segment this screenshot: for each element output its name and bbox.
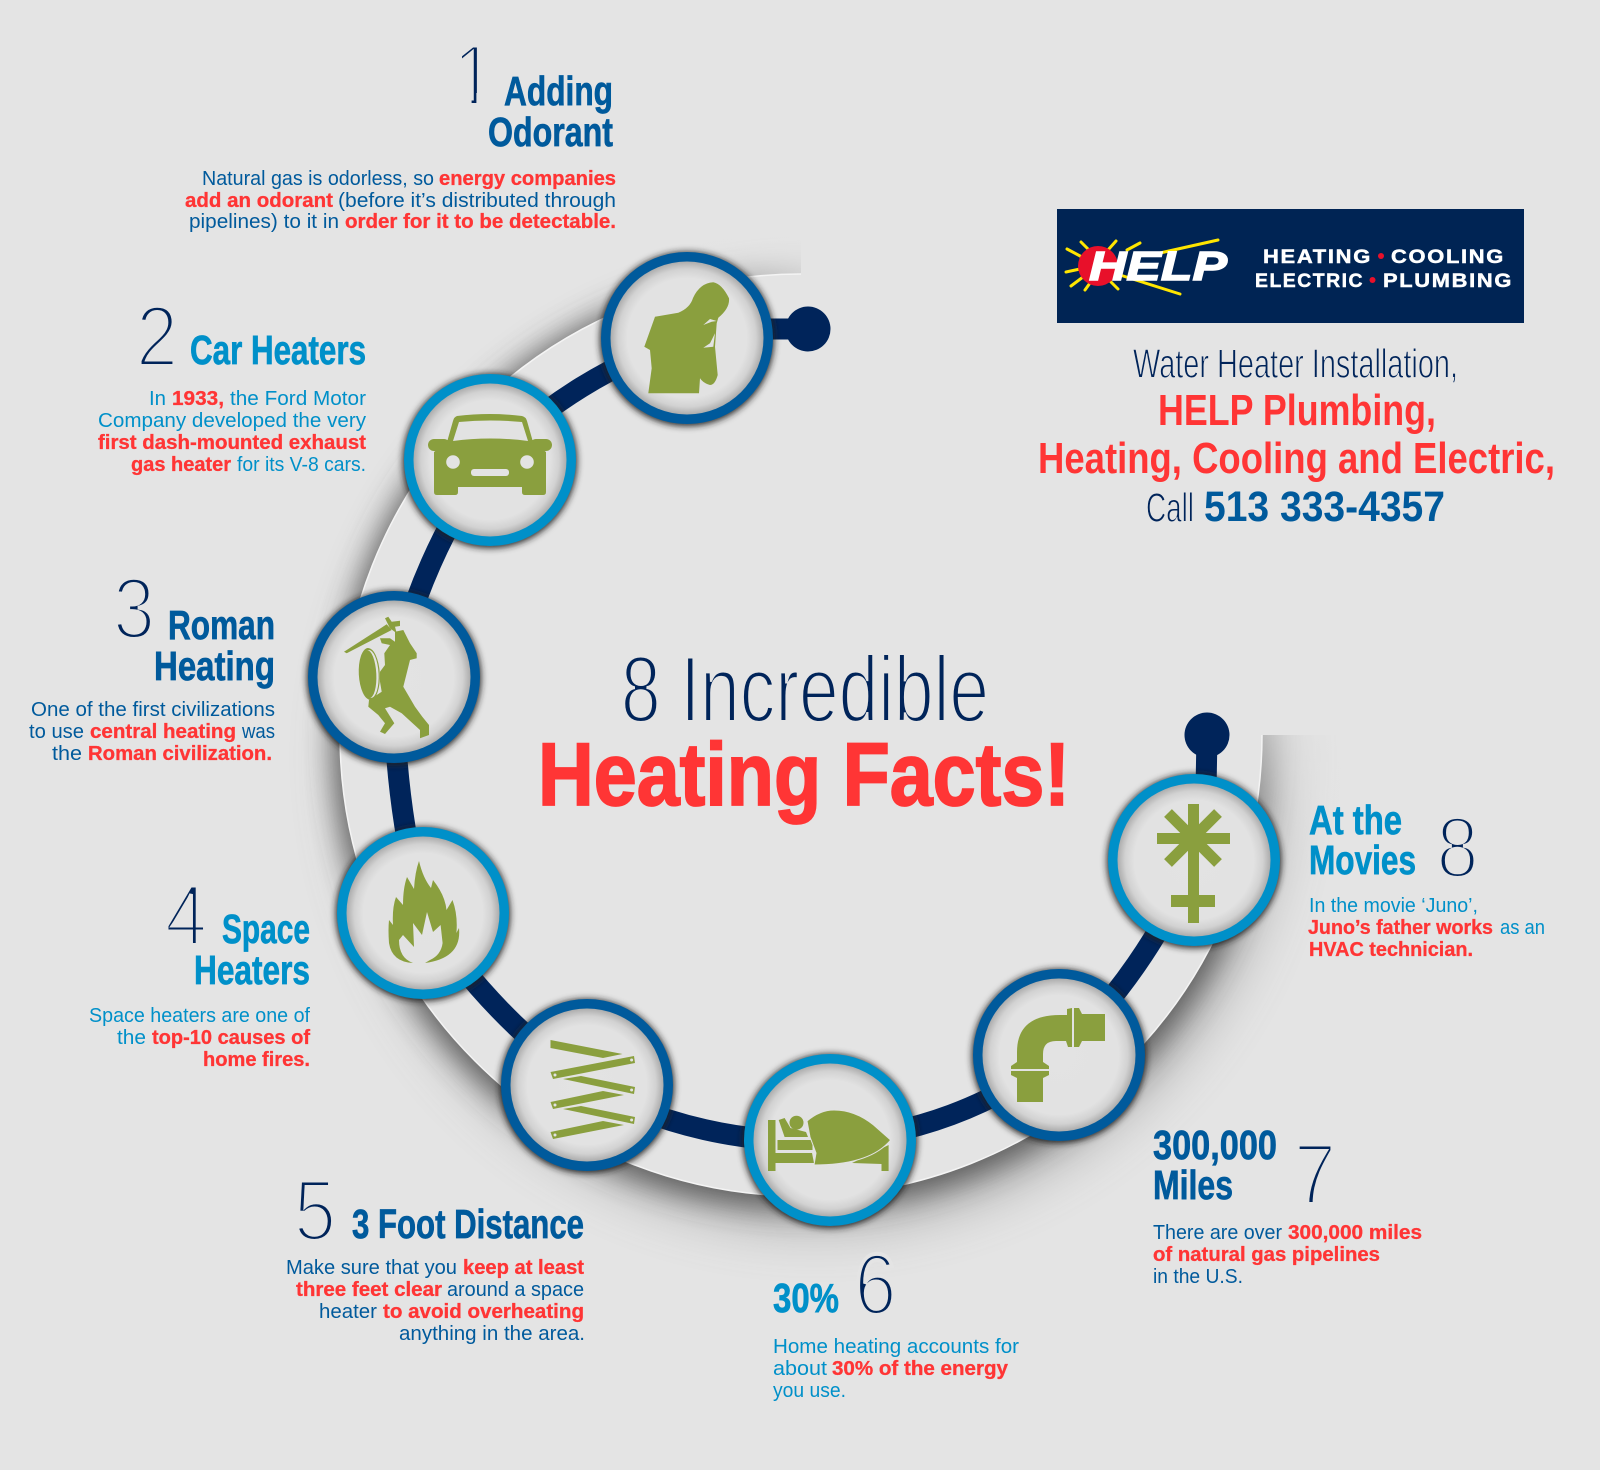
body text [98,388,366,476]
body text: as an [1500,917,1545,939]
body text: of natural gas pipelines [1153,1244,1380,1266]
body text: One of the first civilizations [31,699,275,721]
title line 1: 8 Incredible [621,636,989,742]
number 6: 6 [854,1237,896,1333]
body text: top-10 causes of [152,1027,310,1049]
logo services text: ELECTRIC [1255,270,1364,292]
logo sun rays [1066,240,1218,294]
fact 2: car heaters [98,289,366,476]
heading: Car Heaters [190,327,366,373]
heading: 3 Foot Distance [352,1201,584,1247]
body text: Space heaters are one of [89,1005,310,1027]
body text: In [149,388,166,410]
body text: first dash-mounted exhaust [98,432,366,454]
body text: the Ford Motor [230,388,366,410]
logo wordmark: HELP [1089,243,1228,289]
heading [194,906,310,993]
heading [1309,797,1416,883]
icon circle 7: pipe elbow [972,969,1146,1143]
body text: to avoid overheating [383,1301,584,1323]
body text: Company developed the very [98,410,366,432]
heading [1153,1122,1277,1208]
body text: There are over [1153,1222,1282,1244]
fact 6: thirty percent [773,1237,1019,1402]
body text: around a space [447,1279,584,1301]
heading: Heating [154,643,275,689]
heading: Roman [168,602,275,648]
body text: HVAC technician. [1309,939,1473,961]
number 3: 3 [113,561,155,657]
company name [1038,386,1555,483]
body text: the [52,743,82,765]
body text: Juno’s father works [1308,917,1493,939]
title line 2: Heating Facts! [538,724,1070,824]
subheading: Water Heater Installation, [1133,340,1458,386]
logo services text: HEATING [1263,246,1372,268]
body text [773,1336,1019,1402]
heading: At the [1309,797,1402,843]
body text: Home heating accounts for [773,1336,1019,1358]
body text: order for it to be detectable. [345,211,616,233]
body text: 1933, [172,388,224,410]
heading: Movies [1309,837,1416,883]
body text [185,168,616,233]
body text: 300,000 miles [1288,1222,1422,1244]
number 1: 1 [453,28,495,124]
body text: was [241,721,275,743]
number 4: 4 [165,868,207,964]
body text: heater [319,1301,377,1323]
body text: energy companies [439,168,616,190]
body text: 30% of the energy [832,1358,1009,1380]
logo sun [1078,246,1118,286]
icon circle 8: asterisk star on a stake [1107,774,1281,948]
heading: Odorant [488,109,613,155]
number 5: 5 [294,1163,336,1259]
timeline arc connecting the eight facts [394,306,1230,1141]
fact 1: adding odorant [185,28,616,233]
heading: Space [222,906,310,952]
body text: for its V-8 cars. [237,454,366,476]
body text: to use [29,721,84,743]
number 2: 2 [136,289,178,385]
body text: keep at least [463,1257,584,1279]
fact 4: space heaters [89,868,310,1071]
body text: Natural gas is odorless, so [202,168,434,190]
fact 3: roman heating [29,561,275,765]
body text: in the U.S. [1153,1266,1243,1288]
heading: 30% [773,1275,839,1321]
body text: about [773,1358,827,1380]
logo services text: PLUMBING [1383,270,1513,292]
body text: pipelines) to it in [189,211,339,233]
icon circle 5: folding ruler [500,999,674,1173]
body text [29,699,275,765]
body text: the [117,1027,146,1049]
body text: you use. [773,1380,846,1402]
logo services text [1255,246,1513,292]
heading: Miles [1153,1162,1233,1208]
number 8: 8 [1436,800,1478,896]
call label: Call [1146,484,1194,530]
body text [1308,895,1545,961]
heading [488,68,613,155]
body text: Make sure that you [286,1257,457,1279]
icon circle 4: flame [336,827,510,1001]
icon circle 6: person in bed [743,1054,917,1228]
body text: three feet clear [296,1279,442,1301]
curved shadow disc behind timeline [333,190,1360,1225]
icon circle 2: car [403,374,577,548]
body text [89,1005,310,1071]
number 7: 7 [1294,1127,1336,1223]
heading: 300,000 [1153,1122,1277,1168]
body text [286,1257,585,1345]
heading: Heaters [194,947,310,993]
heading: Adding [504,68,613,114]
icon circle 1: person smelling [600,252,774,426]
contact call to action [1038,340,1555,531]
logo services text: COOLING [1391,246,1505,268]
body text: anything in the area. [399,1323,585,1345]
fact 8: at the movies [1308,797,1545,961]
phone number: 513 333-4357 [1204,483,1445,531]
body text: Roman civilization. [88,743,272,765]
body text: (before it’s distributed through [338,190,616,212]
body text: gas heater [131,454,231,476]
fact 7: 300,000 miles [1153,1122,1422,1288]
icon circle 3: roman warrior [307,591,481,765]
body text: In the movie ‘Juno’, [1309,895,1478,917]
logo banner [1057,209,1524,323]
body text: add an odorant [185,190,333,212]
body text [1153,1222,1422,1288]
heading [154,602,275,689]
body text: central heating [90,721,236,743]
body text: home fires. [203,1049,310,1071]
fact 5: 3 foot distance [286,1163,585,1345]
company name: HELP Plumbing, [1158,386,1436,435]
main title [538,636,1070,824]
